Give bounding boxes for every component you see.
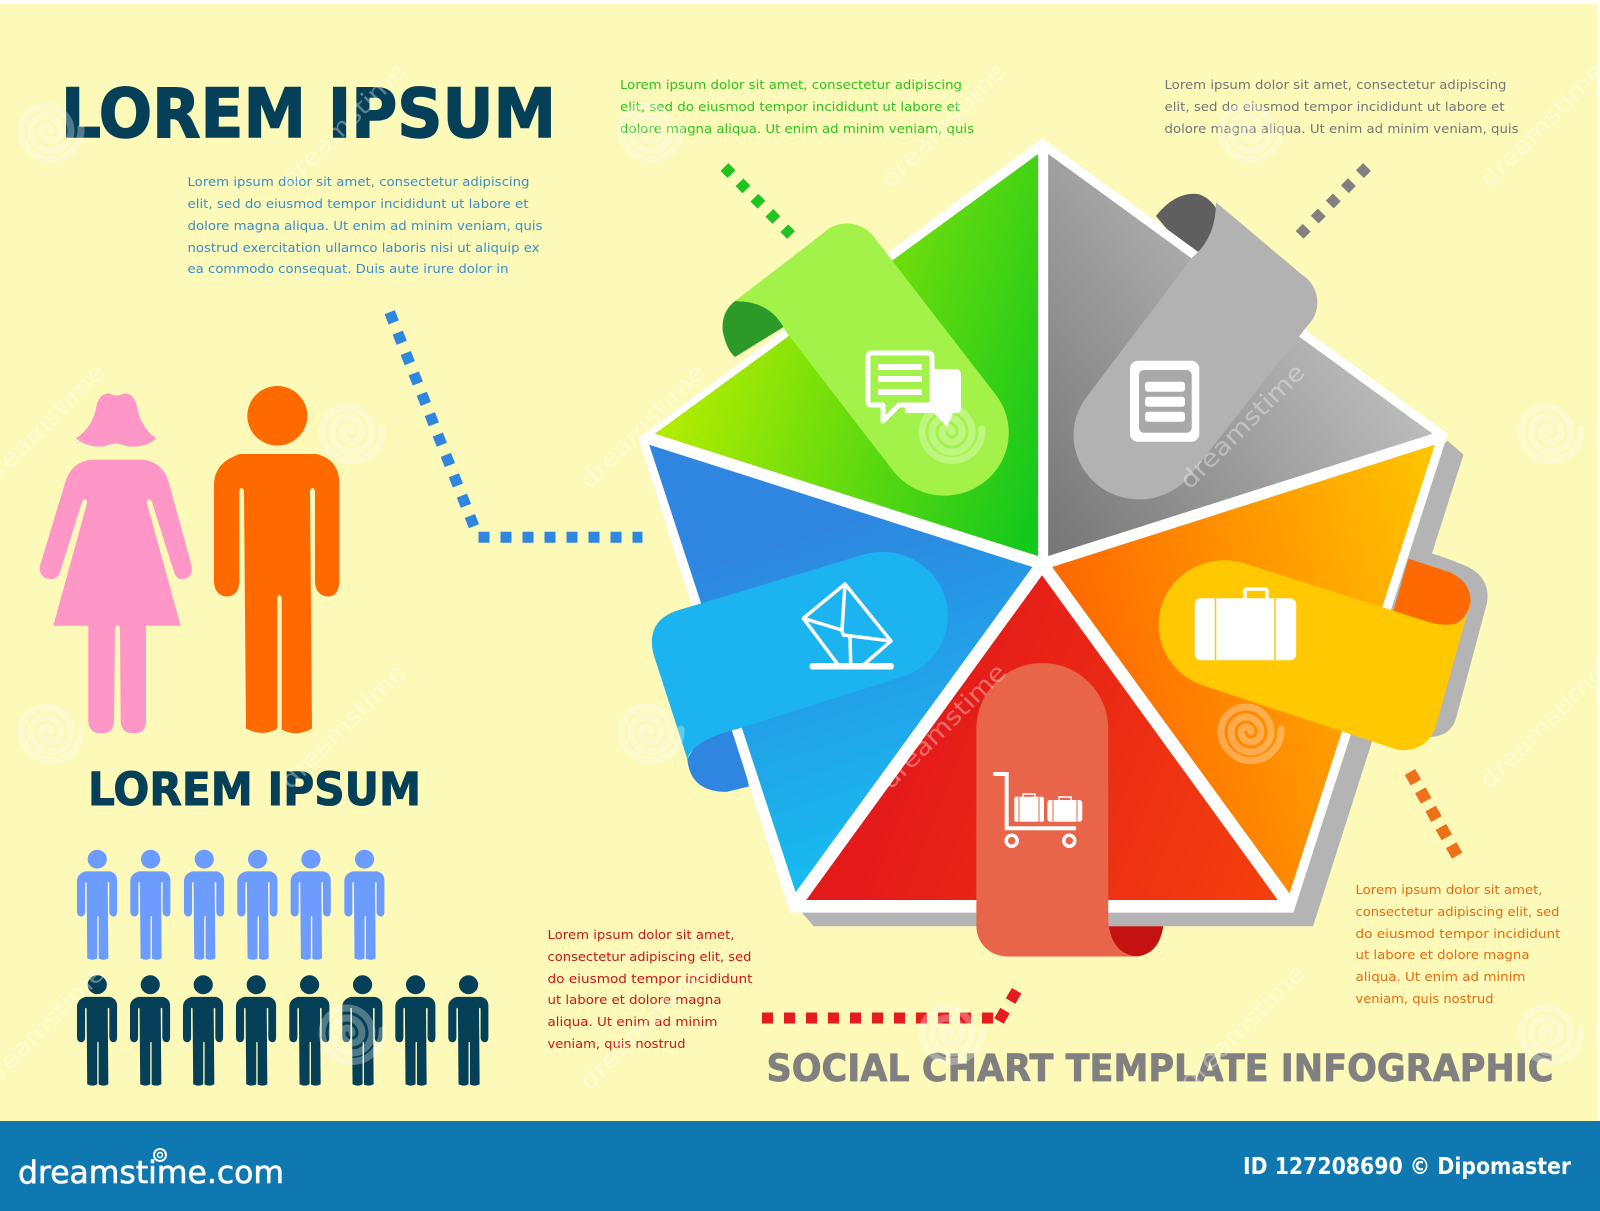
text block: orange: ut labore et dolore magna [1356,947,1530,962]
text block: gray: elit, sed do eiusmod tempor incididunt ut labore et [1164,99,1505,114]
watermark text: dreamstime [1174,959,1311,1096]
figure: man [214,386,339,733]
text block: red: aliqua. Ut enim ad minim [548,1014,718,1029]
text block: blue intro: nostrud exercitation ullamco laboris nisi ut aliquip ex [188,240,540,255]
heading: LOREM IPSUM small: LOREM IPSUM [88,763,421,816]
row: blue people [77,850,384,960]
text block: red: do eiusmod tempor incididunt [548,971,753,986]
text block: red: veniam, quis nostrud [548,1036,686,1051]
ribbon: blue [652,552,948,759]
text block: red: Lorem ipsum dolor sit amet, [548,927,734,942]
text block: blue intro: dolore magna aliqua. Ut enim ad minim veniam, quis [188,218,542,233]
text block: green [620,77,974,136]
icon: envelope [803,584,894,670]
text block: green: Lorem ipsum dolor sit amet, consectetur adipiscing [620,77,962,92]
footer logo: dreamstime.com [18,1155,284,1191]
ribbon: gray [1074,202,1317,499]
ribbon: red curl [1108,926,1163,956]
watermark text: dreamstime [1474,658,1600,795]
leader: orange dotted [1410,772,1459,859]
text block: orange: aliqua. Ut enim ad minim [1356,969,1526,984]
text block: green: dolore magna aliqua. Ut enim ad minim veniam, quis [620,121,974,136]
figure: woman [40,394,192,733]
text block: blue intro [188,174,542,276]
segment: red [806,575,1278,900]
ribbon: green [735,223,1009,496]
text block: orange: Lorem ipsum dolor sit amet, [1356,882,1542,897]
text block: red [548,927,753,1051]
watermark spirals [21,106,1581,1062]
row: dark people [77,975,488,1086]
segment: blue [649,445,1032,892]
title: LOREM IPSUM: LOREM IPSUM [61,75,556,154]
segment: gray [1048,154,1433,556]
text block: orange: veniam, quis nostrud [1356,991,1494,1006]
icon: suitcase [1195,589,1296,660]
icon: document [1130,361,1199,442]
ribbon: yellow [1159,560,1470,750]
text block: blue intro: elit, sed do eiusmod tempor incididunt ut labore et [188,196,529,211]
text block: gray: dolore magna aliqua. Ut enim ad minim veniam, quis [1164,121,1518,136]
leader: blue dotted [390,312,642,537]
watermark text: dreamstime [1174,358,1311,495]
leader: red dotted [762,985,1020,1021]
text block: green: elit, sed do eiusmod tempor incididunt ut labore et [620,99,960,114]
watermark text: dreamstime [275,57,412,194]
pentagon chart [639,138,1488,956]
text block: blue intro: Lorem ipsum dolor sit amet, consectetur adipiscing [188,174,530,189]
watermark text: dreamstime [1474,57,1600,194]
text block: orange: consectetur adipiscing elit, sed [1356,904,1560,919]
text block: red: consectetur adipiscing elit, sed [548,949,752,964]
segment: green [655,154,1038,556]
watermark text: dreamstime [574,959,711,1096]
icon: chat bubbles [868,353,961,427]
leader: gray dotted [1298,167,1367,236]
watermark text: dreamstime [875,57,1012,194]
watermark text: dreamstime [275,658,412,795]
segment: orange [1052,445,1435,893]
footer bar [0,1121,1600,1211]
text block: orange: do eiusmod tempor incididunt [1356,926,1561,941]
text block: red: ut labore et dolore magna [548,992,722,1007]
ribbon: red [976,663,1136,956]
text block: gray [1164,77,1518,136]
heading: social chart template infographic: SOCIAL CHART TEMPLATE INFOGRAPHIC [766,1047,1554,1090]
ribbon: orange curl [1393,559,1471,626]
text block: orange [1356,882,1561,1006]
people figures [40,386,488,1086]
watermark text: dreamstime [574,358,711,495]
text block: gray: Lorem ipsum dolor sit amet, consectetur adipiscing [1164,77,1506,92]
leader: green dotted [724,167,791,235]
watermark text: dreamstime [875,658,1012,795]
ribbon curls [687,194,1223,792]
pentagon shadow [800,441,1488,926]
icon: luggage cart [993,774,1082,846]
white pentagon base [639,138,1448,913]
text block: blue intro: ea commodo consequat. Duis aute irure dolor in [188,261,508,276]
